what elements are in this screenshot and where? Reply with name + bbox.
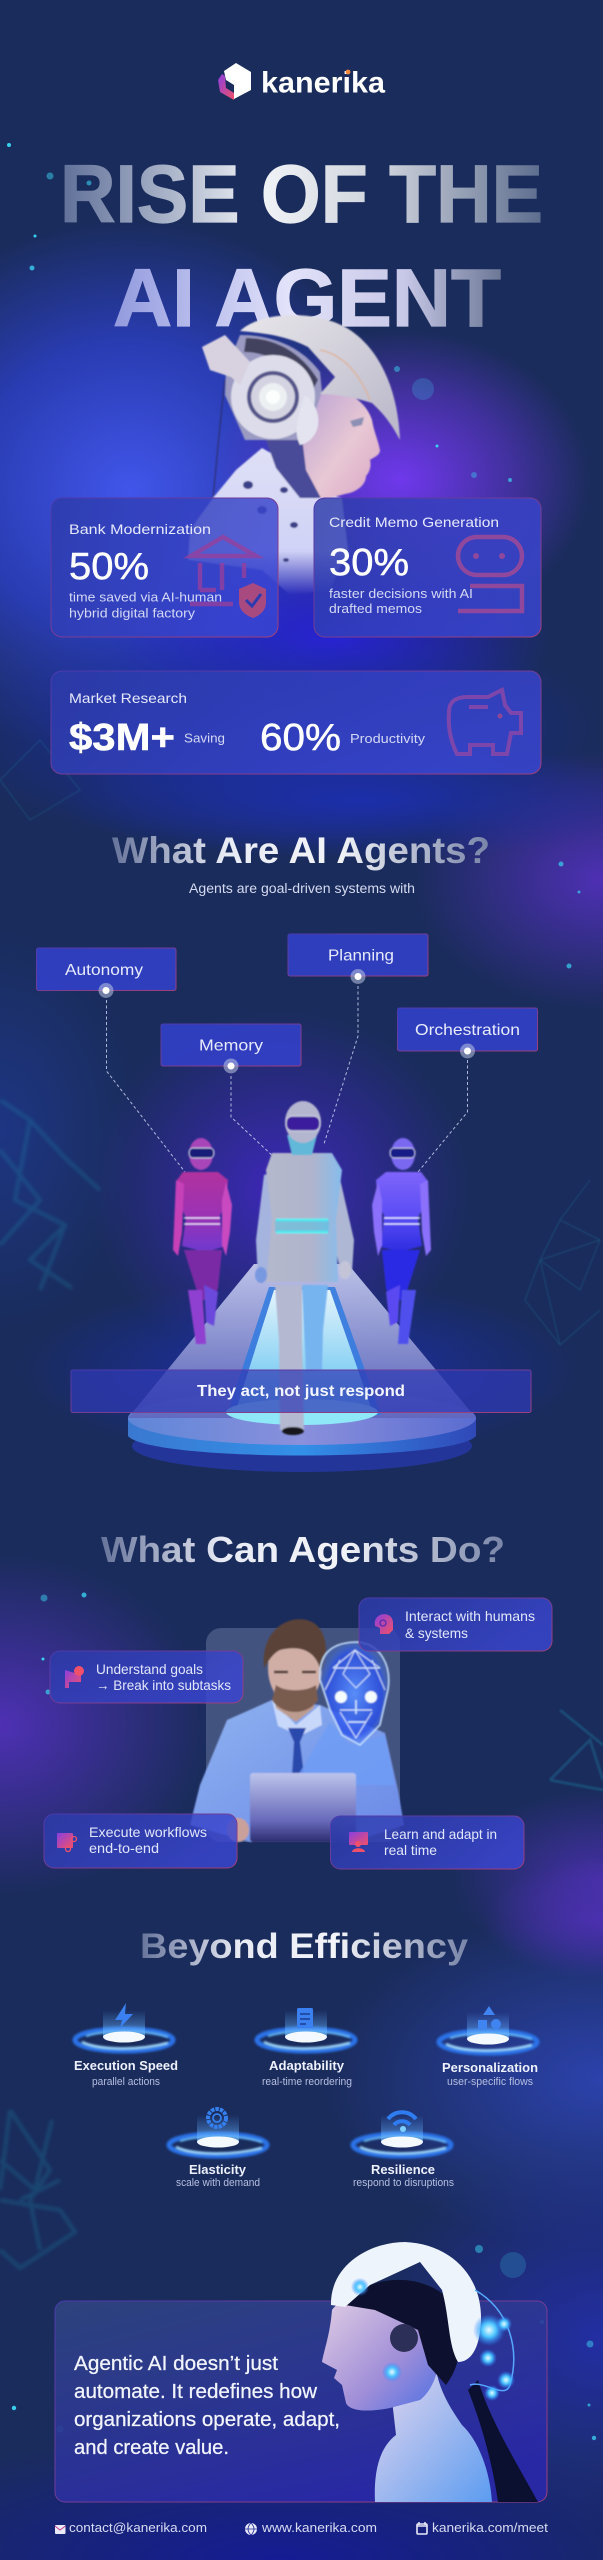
card: bank modernization: Bank Modernization (69, 521, 211, 537)
card: bank modernization (51, 498, 278, 637)
callout: execute workflows (44, 1814, 237, 1868)
benefit: adaptability: Adaptability (269, 2058, 345, 2073)
label: planning (288, 934, 428, 984)
title: RISE OF THE (60, 149, 543, 240)
card: market research (51, 671, 541, 774)
illustration: cyborg woman profile (322, 2242, 538, 2502)
callout: understand goals: Understand goals (96, 1661, 203, 1677)
callout: execute workflows: Execute workflows (89, 1824, 207, 1840)
closing statement: Agentic AI doesn’t just (74, 2353, 278, 2375)
icon: bank with shield (190, 537, 266, 618)
icon: gear (208, 2109, 226, 2127)
card: bank modernization: 50% (69, 546, 149, 588)
label: orchestration: Orchestration (415, 1022, 520, 1039)
banner: they act, not just respond (71, 1370, 531, 1412)
closing panel (55, 2242, 547, 2502)
label: memory (161, 1024, 301, 1074)
benefit: resilience (353, 2112, 454, 2189)
benefit: adaptability: real-time reordering (262, 2076, 352, 2088)
label: orchestration (398, 1008, 538, 1058)
icon: piggy bank (449, 690, 521, 754)
callout: learn and adapt: real time (384, 1842, 437, 1858)
figure: central white agent (255, 1101, 354, 1435)
logo: kanerika: kanerika (261, 67, 385, 100)
benefit: execution speed: Execution Speed (74, 2058, 178, 2073)
icon: lightning bolt (115, 2003, 133, 2028)
icon: shapes (478, 2006, 501, 2029)
logo: kanerika (218, 63, 385, 100)
label: autonomy (36, 948, 176, 998)
closing statement: organizations operate, adapt, (74, 2409, 340, 2431)
platform with light path (128, 1264, 476, 1472)
card: credit memo generation: Credit Memo Generation (329, 514, 499, 530)
title (60, 149, 543, 344)
card: credit memo generation: faster decisions with AI (329, 586, 473, 601)
benefit: elasticity: scale with demand (176, 2177, 260, 2189)
callout: interact with humans and systems: Interact with humans (405, 1608, 535, 1624)
card: market research: Saving (184, 731, 225, 746)
footer: meeting link: kanerika.com/meet (432, 2520, 548, 2535)
closing statement: automate. It redefines how (74, 2381, 318, 2403)
benefit: adaptability (257, 2008, 355, 2088)
heading: beyond efficiency: Beyond Efficiency (140, 1927, 469, 1966)
benefit: resilience: Resilience (371, 2162, 435, 2177)
heading: what can agents do: What Can Agents Do? (101, 1529, 505, 1570)
icon: head with spiral (375, 1614, 393, 1634)
benefit: personalization: user-specific flows (447, 2076, 533, 2088)
footer: website: www.kanerika.com (261, 2520, 377, 2535)
icon: checklist (297, 2008, 313, 2028)
figure: right violet agent (372, 1138, 431, 1344)
callout: understand goals (50, 1651, 243, 1703)
icon: workflow (57, 1833, 76, 1852)
footer: email: contact@kanerika.com (69, 2520, 207, 2535)
benefit: personalization (439, 2006, 538, 2088)
callout: learn and adapt: Learn and adapt in (384, 1826, 497, 1842)
closing statement: and create value. (74, 2437, 229, 2459)
illustration: man with laptop and holographic ai head (190, 1619, 404, 1842)
closing statement (74, 2353, 340, 2459)
label: planning: Planning (328, 948, 394, 965)
dashed connector lines (106, 986, 468, 1172)
title: AI AGENT (113, 253, 501, 344)
figure: left magenta agent (173, 1138, 232, 1344)
callout: interact with humans and systems (359, 1598, 552, 1651)
callout: understand goals: → Break into subtasks (96, 1677, 231, 1693)
benefit: resilience: respond to disruptions (353, 2177, 454, 2189)
card: bank modernization: hybrid digital factory (69, 606, 196, 620)
benefit: execution speed: parallel actions (92, 2076, 160, 2088)
benefit: personalization: Personalization (442, 2060, 538, 2075)
card: market research: Market Research (69, 690, 187, 706)
benefit: elasticity (169, 2109, 267, 2189)
card: credit memo generation: 30% (329, 542, 409, 584)
icon: flag with check (65, 1666, 84, 1688)
card: credit memo generation: drafted memos (329, 601, 423, 616)
benefit: execution speed (74, 2003, 178, 2088)
label: autonomy: Autonomy (65, 962, 143, 979)
callout: interact with humans and systems: & systems (405, 1625, 468, 1641)
card: bank modernization: time saved via AI-human (69, 590, 222, 605)
card: market research: 60% (260, 717, 341, 759)
icon: screen learner (349, 1832, 368, 1852)
benefit: elasticity: Elasticity (189, 2162, 247, 2177)
callout: learn and adapt (330, 1816, 524, 1869)
card: market research: Productivity (350, 731, 426, 746)
label: memory: Memory (199, 1038, 263, 1055)
card: market research: $3M+ (69, 717, 175, 759)
banner: they act, not just respond: They act, not just respond (197, 1383, 405, 1400)
icon: robot (458, 537, 522, 611)
icon: signal waves (388, 2112, 416, 2132)
callout: execute workflows: end-to-end (89, 1840, 159, 1856)
card: credit memo generation (314, 498, 541, 637)
subheading: Agents are goal-driven systems with (189, 881, 415, 896)
heading: what are ai agents: What Are AI Agents? (112, 830, 490, 871)
illustration: cyborg woman with helmet (188, 315, 400, 595)
